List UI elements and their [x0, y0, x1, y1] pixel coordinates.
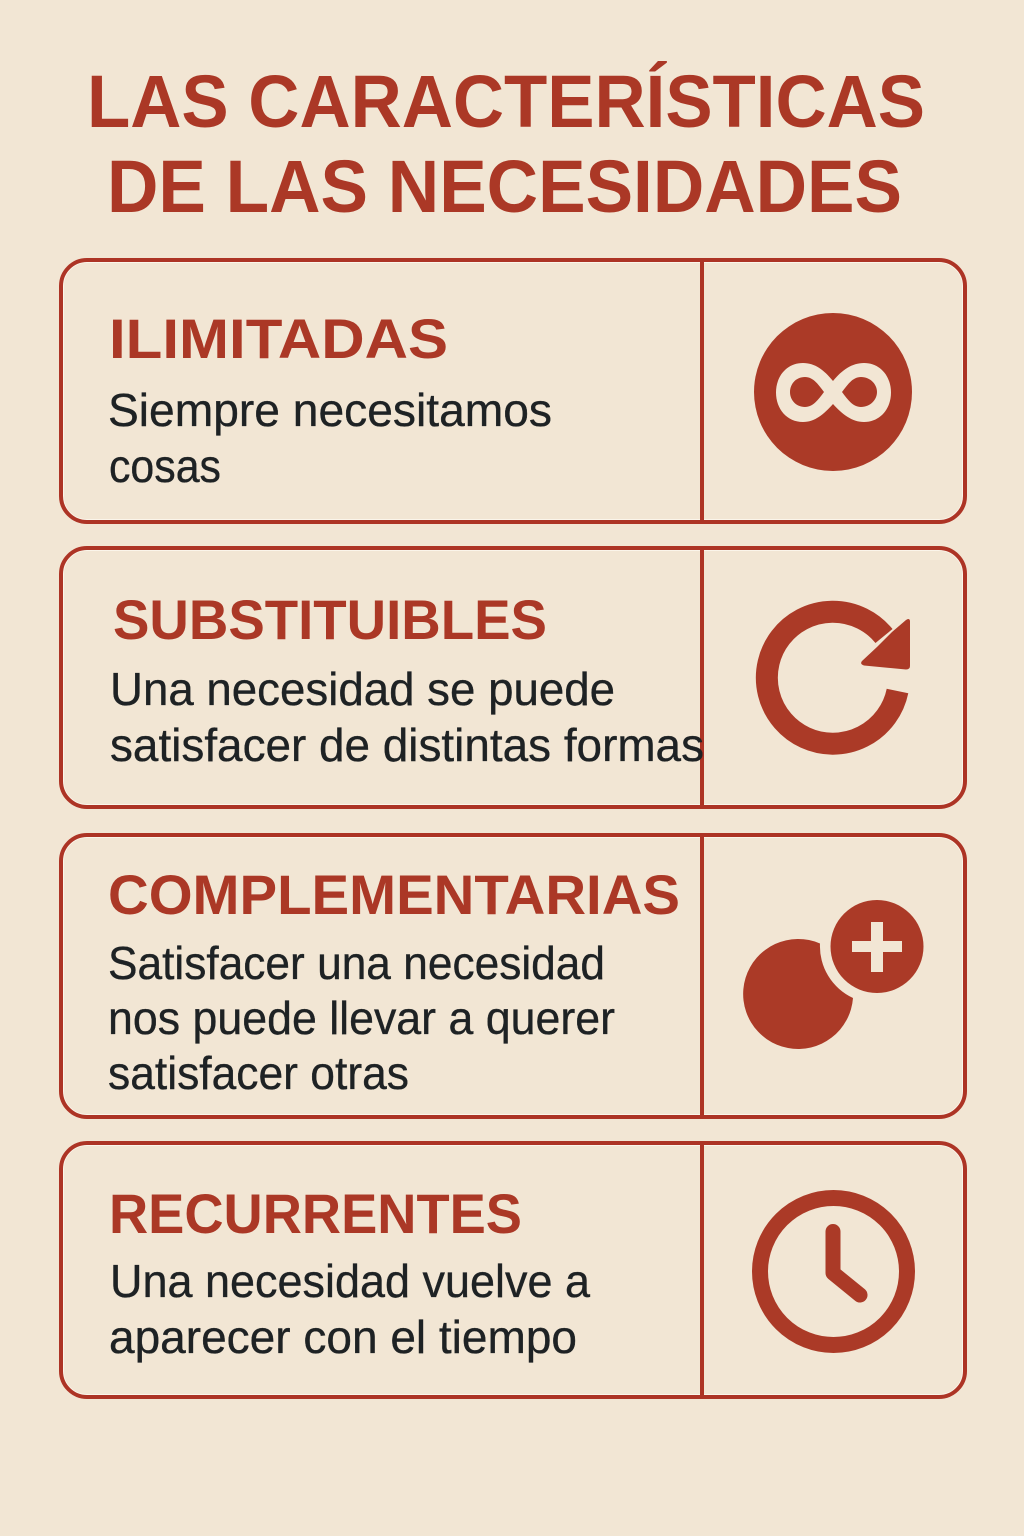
panel: ilimitadas — [61, 260, 965, 522]
panel: recurrentes — [61, 1143, 965, 1397]
title: LAS CARACTERÍSTICAS — [87, 60, 925, 143]
text: complementarias description: nos puede llevar a querer — [108, 992, 615, 1044]
icon: circles with plus — [743, 900, 924, 1049]
text: recurrentes description: Una necesidad vuelve a — [110, 1255, 590, 1307]
title: DE LAS NECESIDADES — [107, 145, 902, 228]
panel: complementarias — [61, 835, 965, 1117]
text: complementarias description — [108, 937, 615, 1099]
text: recurrentes description: aparecer con el tiempo — [109, 1311, 577, 1363]
panel: substituibles — [61, 548, 965, 807]
title — [87, 60, 925, 228]
icon: circular arrow — [767, 612, 910, 744]
heading: complementarias: COMPLEMENTARIAS — [108, 863, 680, 926]
text: substituibles description — [110, 663, 704, 771]
text: ilimitadas description: cosas — [109, 440, 221, 492]
text: ilimitadas description — [108, 384, 552, 492]
text: complementarias description: Satisfacer una necesidad — [108, 937, 605, 989]
heading: substituibles: SUBSTITUIBLES — [113, 588, 547, 651]
text: recurrentes description — [109, 1255, 590, 1363]
text: ilimitadas description: Siempre necesitamos — [108, 384, 552, 436]
icon: clock — [760, 1198, 907, 1345]
icon: infinity — [754, 313, 912, 471]
text: substituibles description: satisfacer de distintas formas — [110, 719, 704, 771]
heading: ilimitadas: ILIMITADAS — [109, 307, 448, 370]
text: complementarias description: satisfacer otras — [108, 1047, 409, 1099]
text: substituibles description: Una necesidad se puede — [110, 663, 615, 715]
heading: recurrentes: RECURRENTES — [109, 1182, 522, 1245]
